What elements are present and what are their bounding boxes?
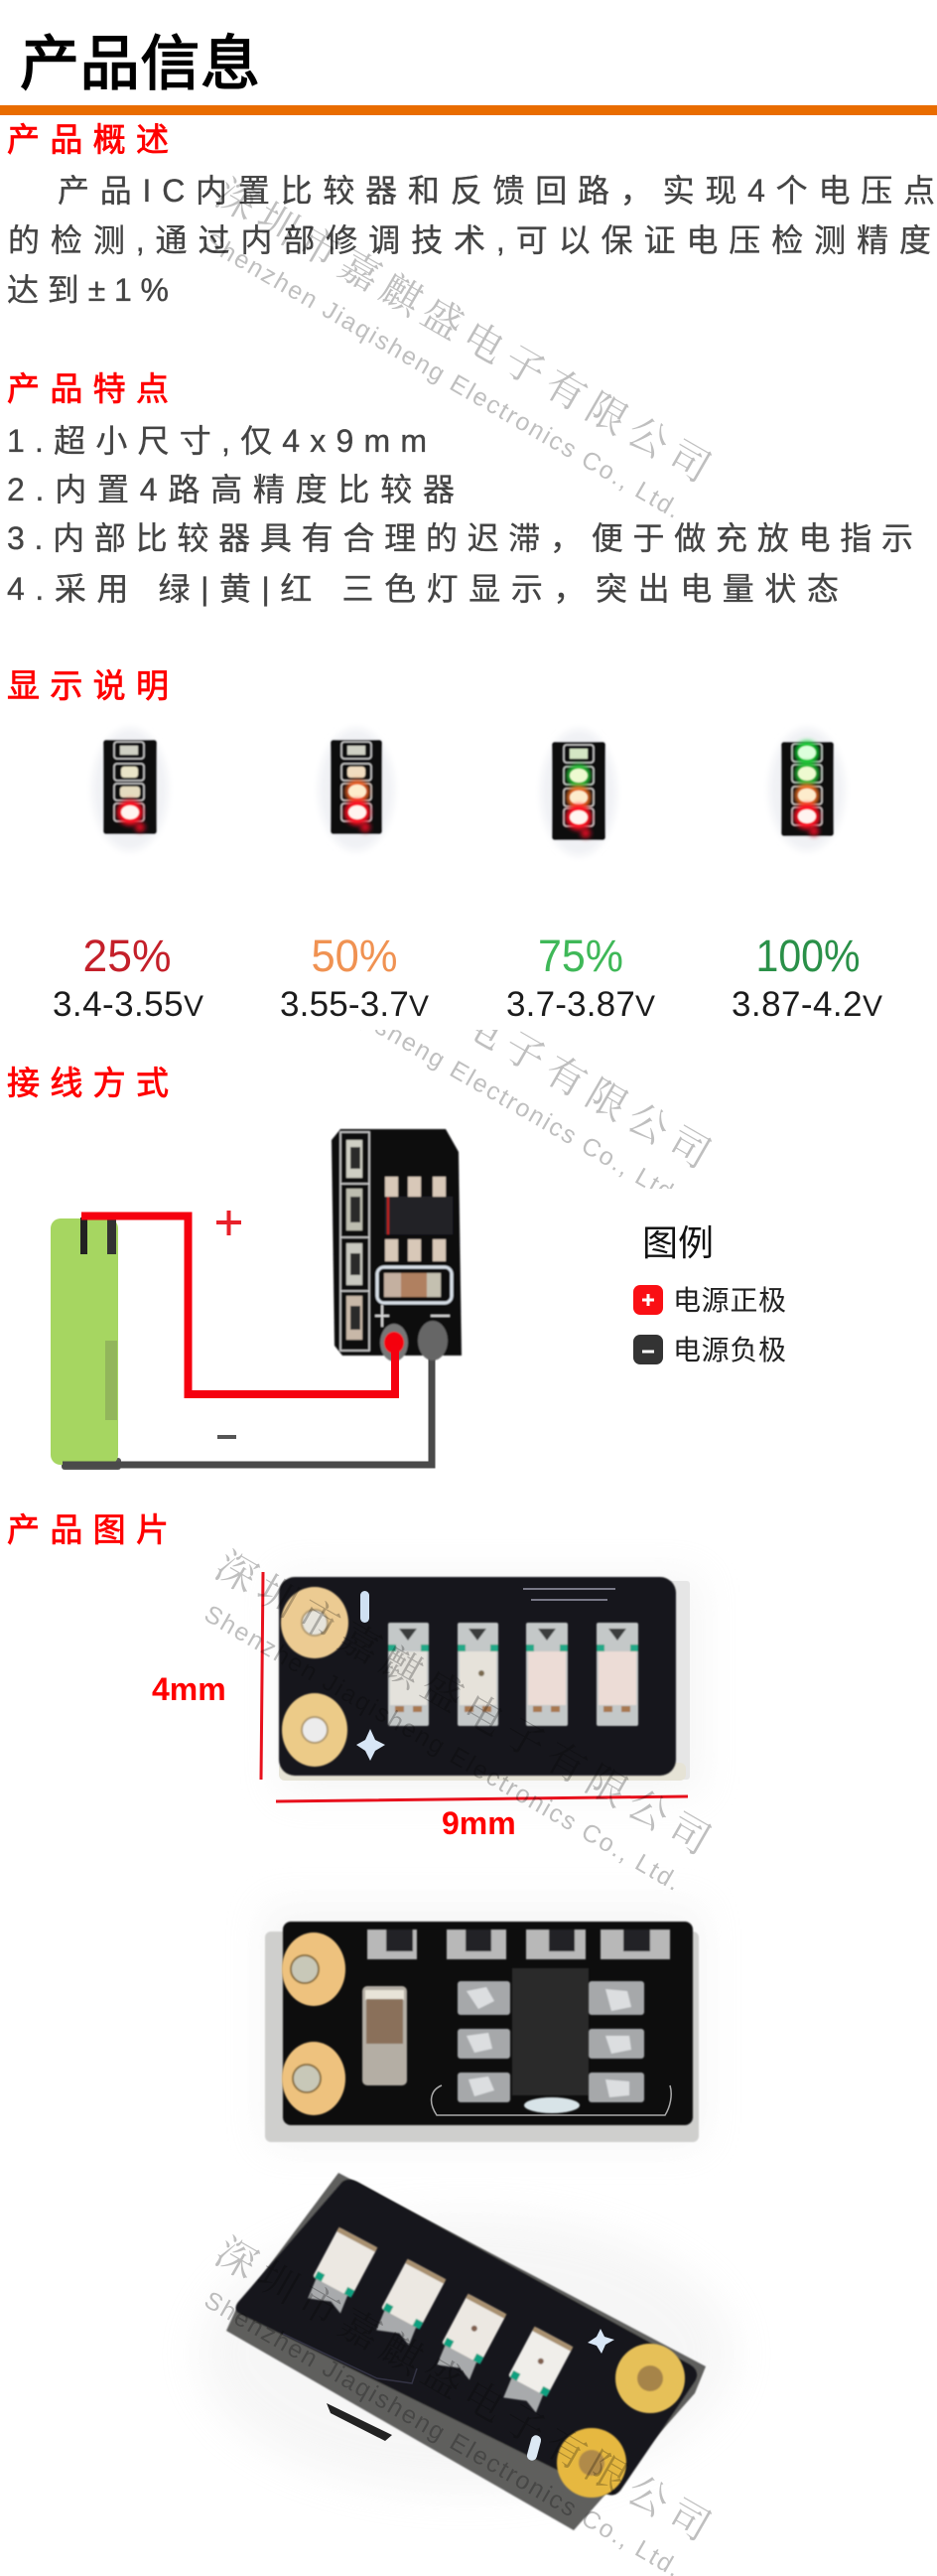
section: product overview: [7, 121, 935, 308]
plus sign: [216, 1211, 241, 1235]
indicator module: 75%: [541, 729, 616, 856]
LEDs angled: [303, 2227, 573, 2415]
heading: wiring method: 接线方式: [7, 1065, 169, 1101]
IC visible beneath board: [327, 2403, 392, 2441]
watermark 3: 深圳市嘉麒盛电子有限公司: [206, 1535, 723, 1866]
overview paragraph: 达到±1%: [7, 272, 169, 308]
indicator module: 100%: [769, 728, 845, 851]
watermark 2: [361, 1030, 712, 1189]
negative wire: [63, 1356, 432, 1465]
level label: 25%: [53, 930, 203, 1024]
legend: [633, 1222, 786, 1365]
level label: 75%: 75%: [538, 930, 623, 981]
watermark 2: 深圳市嘉麒盛电子有限公司: [206, 849, 723, 1180]
level label: 100%: [732, 930, 882, 1024]
watermark 2: Shenzhen Jiaqisheng Electronics Co., Ltd.: [200, 914, 685, 1211]
capacitor: [362, 1986, 407, 2085]
photo: board top with dimensions: [152, 1572, 701, 1841]
positive wire: [81, 1216, 395, 1394]
feature list: [7, 423, 913, 607]
title: 产品信息: [20, 31, 260, 97]
watermark 1: 深圳市嘉麒盛电子有限公司: [206, 163, 723, 494]
watermark 4: Shenzhen Jiaqisheng Electronics Co., Ltd.: [200, 2286, 685, 2576]
level label: 100%: 100%: [756, 930, 860, 981]
watermark 4: 深圳市嘉麒盛电子有限公司: [206, 2221, 723, 2552]
indicator module: 25%: [92, 728, 168, 851]
level label: 100%: 3.87-4.2V: [732, 985, 882, 1024]
overview paragraph: 产品IC内置比较器和反馈回路，实现4个电压点: [58, 173, 935, 209]
orange divider bar: [0, 105, 937, 115]
feature list: 1.超小尺寸,仅4x9mm: [7, 423, 427, 459]
legend title: 图例: [642, 1222, 714, 1263]
icon: battery: [51, 1217, 121, 1470]
feature list: 2.内置4路高精度比较器: [7, 472, 455, 507]
watermark 1: Shenzhen Jiaqisheng Electronics Co., Ltd.: [200, 227, 685, 524]
LED backs: [367, 1930, 670, 1959]
solder joints: [458, 1981, 644, 2102]
wiring diagram: [51, 1129, 786, 1470]
overview paragraph: [7, 173, 935, 308]
level label: 25%: 25%: [83, 930, 171, 981]
level label: 50%: 50%: [312, 930, 397, 981]
level label: 50%: 3.55-3.7V: [280, 985, 429, 1024]
gold pads, angled: [557, 2344, 685, 2498]
dimension label: 9mm: 9mm: [442, 1805, 516, 1841]
level label: 50%: [280, 930, 429, 1024]
photo: angled board: [199, 2173, 735, 2530]
legend item: positive: 电源正极: [673, 1285, 786, 1316]
board face: [235, 2180, 697, 2496]
IC chip: [512, 1968, 589, 2113]
section: product features: [7, 370, 913, 607]
board edge: [226, 2173, 706, 2530]
watermark 3: Shenzhen Jiaqisheng Electronics Co., Ltd.: [200, 1600, 685, 1897]
minus sign: [217, 1435, 236, 1439]
photo: board bottom: [265, 1907, 702, 2145]
heading: product features: 产品特点: [7, 370, 169, 407]
gold pads, back: [282, 1932, 345, 2115]
heading: display description: 显示说明: [7, 667, 169, 704]
gold solder pads: [281, 1587, 348, 1767]
feature list: 3.内部比较器具有合理的迟滞，便于做充放电指示: [7, 520, 913, 556]
dimension label: 4mm: 4mm: [152, 1671, 226, 1707]
level label: 25%: 3.4-3.55V: [53, 985, 203, 1024]
LEDs: [388, 1623, 638, 1726]
dimension lines: [261, 1572, 688, 1801]
level label: 75%: 3.7-3.87V: [506, 985, 655, 1024]
legend item: negative: 电源负极: [673, 1335, 786, 1365]
level label: 75%: [506, 930, 655, 1024]
indicator board back: [332, 1129, 462, 1361]
heading: product photos: 产品图片: [7, 1511, 169, 1548]
feature list: 4.采用 绿|黄|红 三色灯显示，突出电量状态: [7, 571, 839, 607]
indicator module: 50%: [319, 728, 394, 851]
overview paragraph: 的检测,通过内部修调技术,可以保证电压检测精度: [8, 222, 931, 258]
heading: product overview: 产品概述: [7, 121, 169, 158]
